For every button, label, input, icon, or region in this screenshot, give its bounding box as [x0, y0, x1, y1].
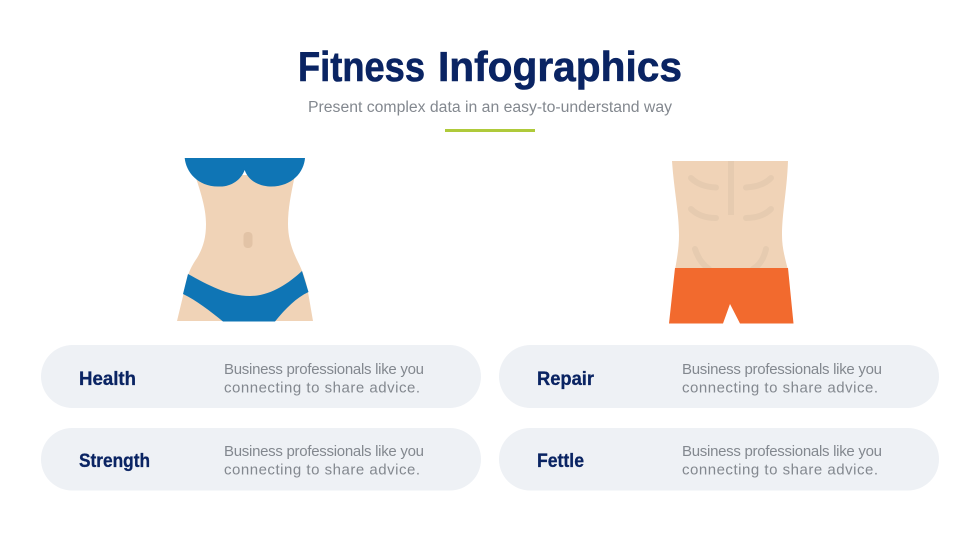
heading: health: Health — [79, 368, 136, 390]
panel: health — [41, 345, 481, 408]
navel — [244, 232, 252, 248]
title: Fitness — [298, 43, 425, 90]
panel: repair — [499, 345, 939, 408]
torso skin — [177, 175, 313, 321]
accent underline — [445, 129, 535, 132]
title: Infographics — [438, 43, 682, 90]
subtitle: Present complex data in an easy-to-understand way — [308, 99, 672, 116]
text: health description: connecting to share advice. — [224, 380, 420, 396]
heading: repair: Repair — [537, 368, 594, 390]
bikini top — [185, 158, 305, 187]
torso skin — [672, 161, 788, 270]
panel: fettle — [499, 428, 939, 490]
heading: fettle: Fettle — [537, 450, 584, 472]
text: fettle description: connecting to share advice. — [682, 462, 878, 478]
panel: strength — [41, 428, 481, 490]
text: strength description: connecting to share advice. — [224, 462, 420, 478]
heading: strength: Strength — [79, 450, 150, 472]
orange shorts — [669, 268, 794, 324]
text: fettle description: Business professionals like you — [682, 443, 882, 460]
text: repair description: Business professionals like you — [682, 361, 882, 378]
text: repair description: connecting to share advice. — [682, 380, 878, 396]
abdominal lines — [691, 161, 771, 269]
text: health description: Business professionals like you — [224, 361, 424, 378]
icon: male torso — [669, 161, 794, 324]
icon: female torso — [177, 158, 313, 322]
bikini bottom — [183, 271, 308, 322]
text: strength description: Business professionals like you — [224, 443, 424, 460]
